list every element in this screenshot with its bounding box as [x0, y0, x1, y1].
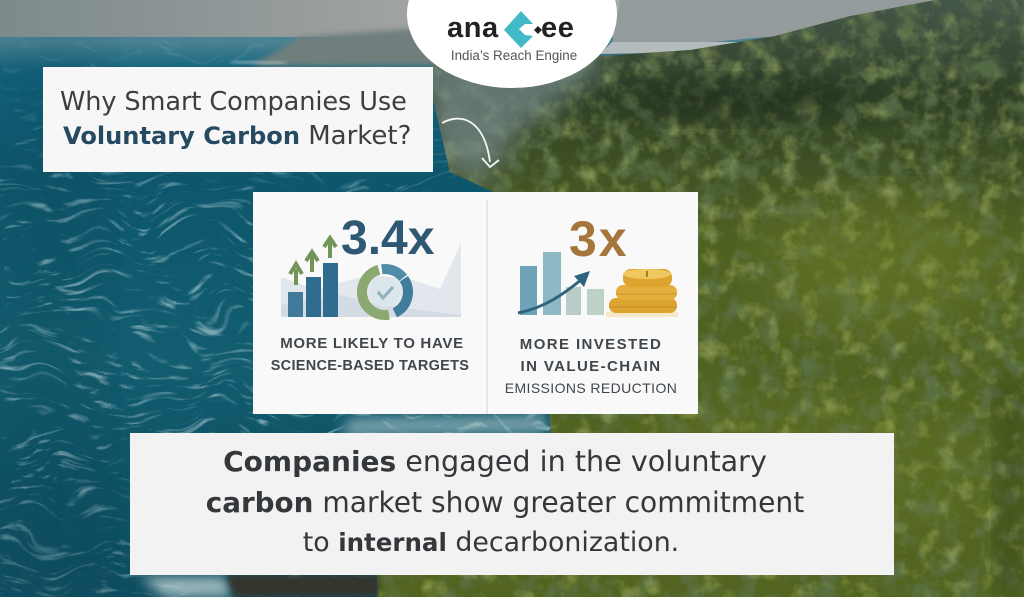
title line 1: Why Smart Companies Use: [60, 87, 407, 117]
stat number 3x: 3x: [569, 211, 629, 267]
logo badge: [407, 0, 617, 88]
summary line 2: carbon market show greater commitment: [206, 486, 804, 519]
stat number 3.4x: 3.4x: [341, 212, 434, 265]
stat label: [271, 335, 469, 374]
stats panel: [253, 192, 698, 414]
chart icon: bars, arrow and coins: [518, 252, 678, 317]
summary panel: [130, 433, 894, 575]
stat: 3x: [505, 211, 678, 396]
logo tagline: India’s Reach Engine: [451, 48, 577, 63]
stat label: [505, 336, 677, 396]
stat label: IN VALUE-CHAIN: [520, 358, 661, 375]
summary line 1: Companies engaged in the voluntary: [223, 444, 767, 478]
stat: 3.4x: [271, 212, 469, 374]
logo wordmark: ee: [541, 12, 574, 44]
chart icon: bars, arrows and donut: [281, 234, 461, 320]
arrow: curved, pointing down to stats: [442, 118, 500, 168]
summary line 3: to internal decarbonization.: [303, 527, 679, 558]
logo wordmark: ana: [447, 12, 499, 44]
logo icon: teal diamond: [504, 11, 533, 48]
stat label: EMISSIONS REDUCTION: [505, 380, 677, 396]
logo wordmark: [447, 11, 574, 48]
logo dot: [534, 26, 542, 34]
stat label: SCIENCE-BASED TARGETS: [271, 358, 469, 374]
title panel: [43, 67, 433, 172]
stat label: MORE INVESTED: [520, 336, 662, 353]
title line 2: Voluntary Carbon Market?: [63, 121, 411, 151]
divider line: [486, 200, 488, 414]
stat label: MORE LIKELY TO HAVE: [280, 335, 464, 352]
